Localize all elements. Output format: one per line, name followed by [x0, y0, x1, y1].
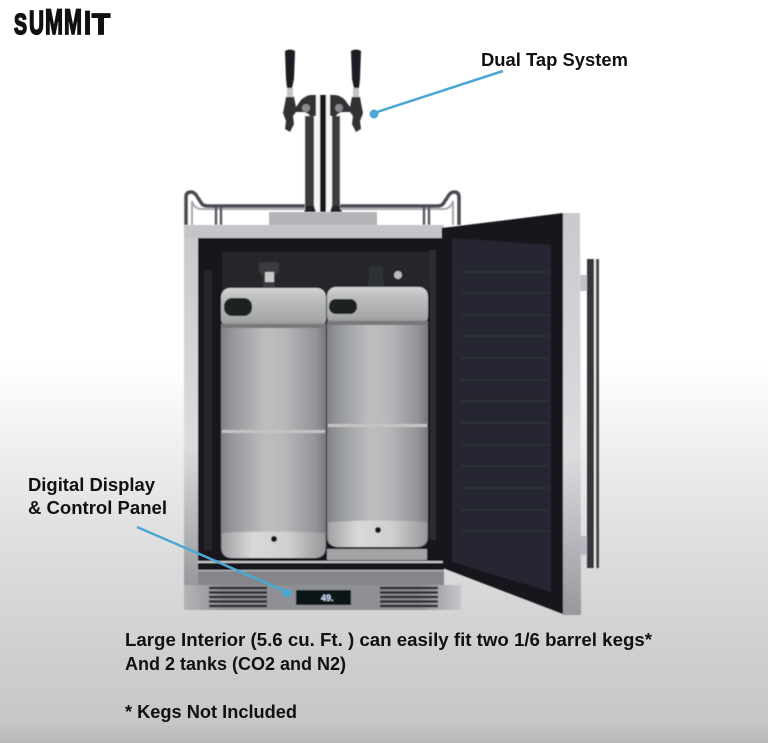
logo: Summit: M: [64, 3, 82, 42]
door frame: [442, 213, 563, 614]
logo: Summit: S: [14, 9, 27, 41]
keg left: [221, 288, 326, 558]
beer tap tower: [283, 50, 363, 212]
front grille panel: [184, 585, 461, 610]
refrigerator cabinet: [184, 225, 461, 610]
interior: [198, 238, 444, 570]
description text: [125, 630, 652, 722]
right tap: [330, 50, 363, 132]
digital display: 49.: [321, 593, 334, 603]
cabinet body: [184, 225, 444, 587]
logo: Summit: [14, 3, 110, 42]
digital display: [296, 590, 351, 605]
keg right: [327, 287, 428, 560]
callout text: Digital Display: [28, 475, 155, 495]
logo: Summit: U: [29, 4, 44, 41]
door shelves: [461, 272, 549, 531]
right vent: [380, 588, 438, 606]
open door: [442, 213, 581, 615]
logo: Summit: T: [92, 9, 110, 41]
callout: digital display and control panel: [28, 475, 292, 598]
description text: * Kegs Not Included: [125, 702, 297, 722]
callout: dual tap system: Dual Tap System: [481, 50, 628, 70]
door liner: [452, 238, 551, 592]
tower column: [304, 95, 342, 212]
left tap: [283, 50, 316, 132]
left vent: [209, 588, 267, 606]
description text: Large Interior (5.6 cu. Ft. ) can easily fit two 1/6 barrel kegs*: [125, 630, 652, 650]
logo: Summit: I: [84, 5, 91, 41]
callout: dual tap system: [370, 50, 628, 118]
callout text: & Control Panel: [28, 498, 167, 518]
floor band: [198, 571, 444, 585]
door handle: [580, 259, 599, 568]
logo: Summit: M: [45, 3, 63, 42]
top rail: [186, 192, 459, 226]
door steel edge: [563, 213, 581, 615]
description text: And 2 tanks (CO2 and N2): [125, 654, 346, 674]
keg couplers: [259, 262, 402, 288]
